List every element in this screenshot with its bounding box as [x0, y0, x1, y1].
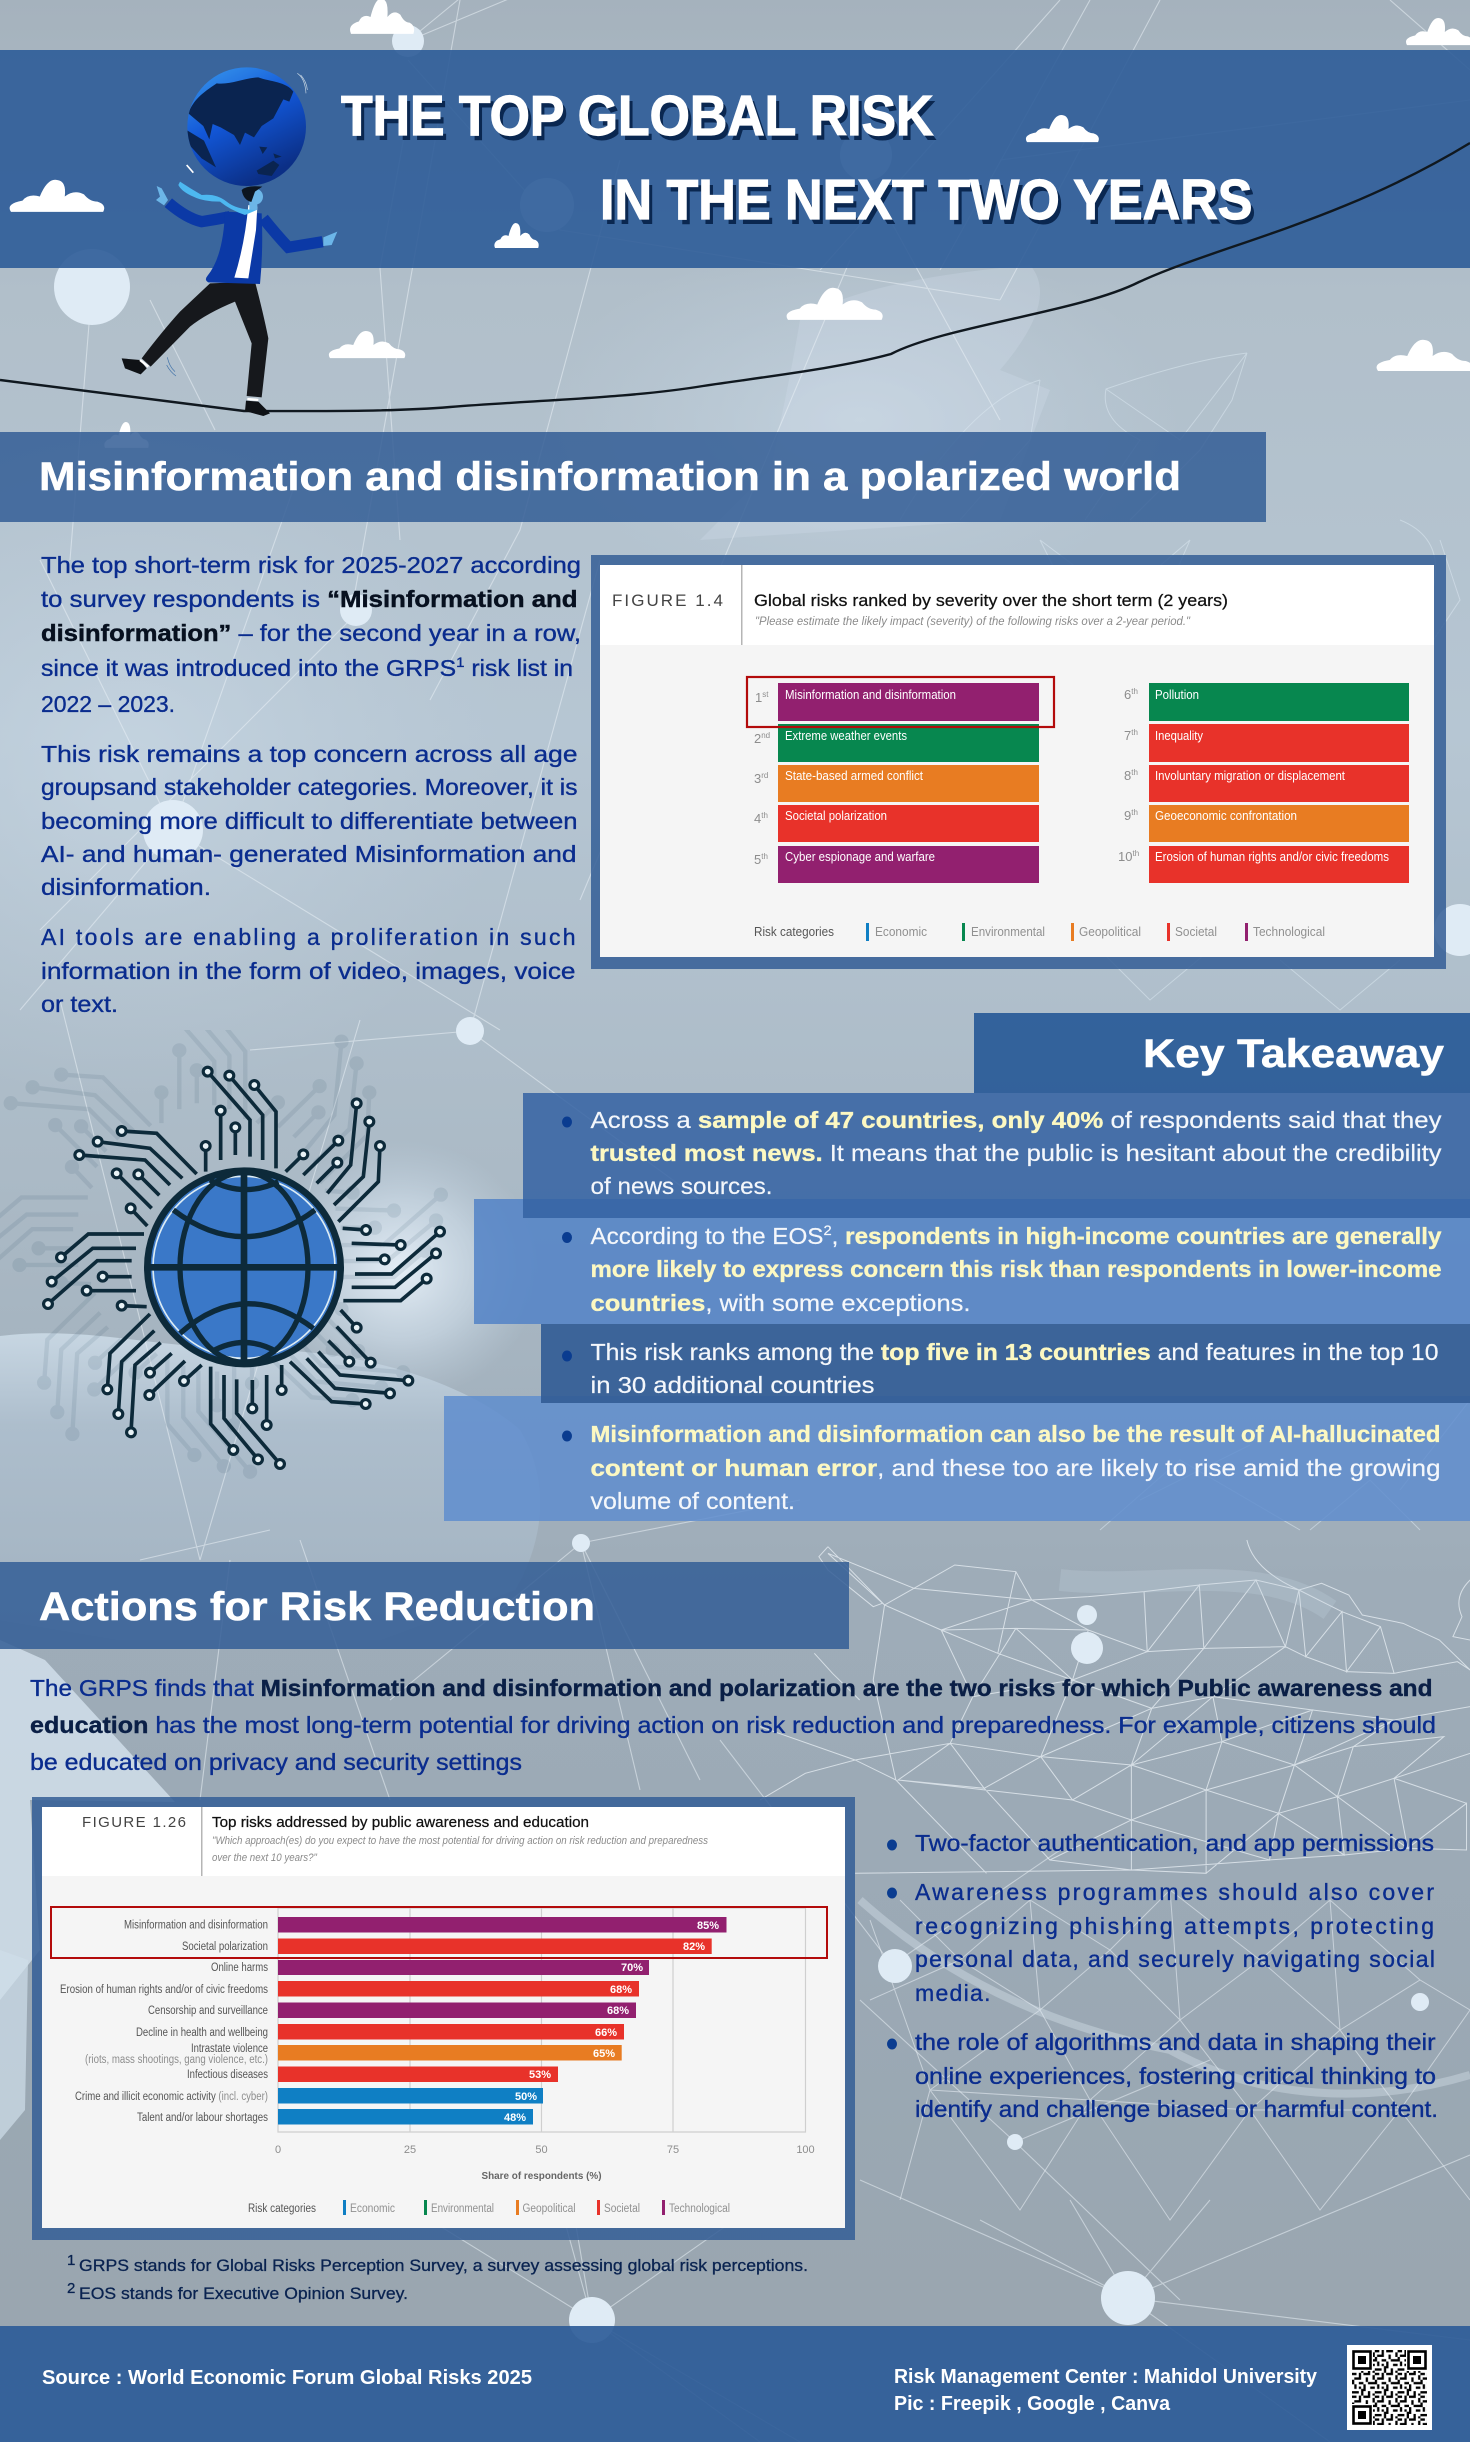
rank labels: 5 [754, 852, 761, 867]
list: awareness actions: personal data, and securely navigating social [915, 1946, 1435, 1972]
bar labels: Erosion of human rights and/or of civic freedoms [60, 1984, 268, 1996]
text block: short-term risk explanation: AI- and human- generated Misinformation and [41, 841, 576, 867]
footnotes: 2 [67, 2280, 75, 2297]
list: awareness actions: Awareness programmes should also cover [915, 1879, 1434, 1905]
bar labels: Talent and/or labour shortages [137, 2112, 268, 2124]
bar values: 85% [697, 1920, 719, 1932]
bullet 2 [562, 1222, 1442, 1316]
bullet 2: respondents in high-income countries are generally [845, 1223, 1442, 1249]
chart heading: over the next 10 years?" [212, 1852, 318, 1864]
text block: short-term risk explanation [40, 552, 581, 1017]
risk bars, ranks 1 to 5: State-based armed conflict [785, 768, 923, 783]
legend: risk categories: Environmental [971, 924, 1045, 939]
text block: short-term risk explanation: This risk remains a top concern across all age [41, 741, 578, 767]
legend: risk categories: Societal [1175, 924, 1217, 939]
x axis: 25 [404, 2144, 416, 2156]
panel: key takeaway [444, 1013, 1470, 1521]
x axis [275, 2144, 815, 2182]
list: awareness actions: identify and challenge biased or harmful content. [915, 2096, 1438, 2122]
icon: circuit globe [0, 1030, 448, 1479]
chart heading [82, 1814, 708, 1864]
bar labels: Decline in health and wellbeing [136, 2027, 268, 2039]
bullet 4: volume of content. [590, 1488, 795, 1514]
bar values: 70% [621, 1962, 643, 1974]
footer band [0, 2326, 1470, 2442]
bar labels: Societal polarization [182, 1941, 268, 1953]
risk bars, ranks 6 to 10: Inequality [1155, 728, 1203, 743]
bullet 1: of news sources. [590, 1173, 772, 1199]
bullet 2: According to the EOS [590, 1223, 812, 1249]
rank labels: 1 [755, 690, 762, 705]
text block: GRPS findings: education has the most long-term potential for driving action on risk reduction and preparedness. For example, citizens should [30, 1712, 1436, 1738]
bar labels [60, 1920, 268, 2124]
bullet 3 [562, 1339, 1438, 1398]
legend: risk categories: Technological [669, 2203, 730, 2215]
text block: short-term risk explanation: AI tools are enabling a proliferation in such [41, 924, 576, 950]
list: awareness actions: the role of algorithms and data in shaping their [915, 2029, 1436, 2055]
risk bars, ranks 1 to 5: Cyber espionage and warfare [785, 849, 935, 864]
risk bars, ranks 6 to 10: Geoeconomic confrontation [1155, 808, 1297, 823]
bar labels: Infectious diseases [187, 2069, 268, 2081]
bar values: 68% [607, 2005, 629, 2017]
list: awareness actions: recognizing phishing attempts, protecting [915, 1913, 1434, 1939]
bullet 4: content or human error , and these too are likely to rise amid the growing [590, 1455, 1440, 1481]
tightrope [0, 142, 1470, 412]
heading: actions for risk reduction: Actions for Risk Reduction [39, 1585, 595, 1629]
legend: risk categories [754, 923, 1325, 941]
text block: short-term risk explanation: information in the form of video, images, voice [41, 958, 576, 984]
rank labels: th [1131, 687, 1138, 696]
bar values: 65% [593, 2048, 615, 2060]
plot grid [278, 1908, 806, 2132]
bar labels: Online harms [211, 1962, 268, 1974]
rank labels: th [761, 811, 768, 820]
footnotes [67, 2252, 808, 2303]
panel: figure 1.26 bar chart [32, 1797, 855, 2240]
bullet 2: more likely to express concern this risk than respondents in lower-income [590, 1256, 1442, 1282]
bullet 2: 2 [823, 1222, 832, 1238]
rank labels: rd [761, 771, 768, 780]
title: THE TOP GLOBAL RISK [341, 84, 933, 148]
rank labels: th [1132, 849, 1139, 858]
text block: short-term risk explanation: becoming more difficult to differentiate between [41, 808, 578, 834]
heading: misinformation section: Misinformation and disinformation in a polarized world [39, 455, 1181, 499]
chart heading: "Please estimate the likely impact (severity) of the following risks over a 2-year period." [755, 616, 1191, 628]
rank labels: 3 [754, 771, 761, 786]
footer credits [894, 2366, 1318, 2415]
list: awareness actions [887, 1830, 1438, 2122]
key takeaway band [974, 1013, 1470, 1093]
bar labels: (riots, mass shootings, gang violence, etc.) [85, 2054, 268, 2066]
header band [0, 50, 1470, 268]
bullet 4: Misinformation and disinformation can also be the result of AI-hallucinated [590, 1421, 1440, 1447]
rank labels: th [761, 852, 768, 861]
rank labels: th [1131, 728, 1138, 737]
bullet 1 [562, 1107, 1442, 1199]
bullet 2: countries , with some exceptions. [590, 1290, 970, 1316]
bar values [504, 1920, 719, 2124]
legend: risk categories: Economic [875, 924, 927, 939]
bars [278, 1917, 726, 2124]
risk bars, ranks 1 to 5: Misinformation and disinformation [785, 687, 956, 702]
text block: short-term risk explanation: risk list in [464, 655, 573, 681]
text block: GRPS findings [30, 1675, 1436, 1776]
risk bars, ranks 6 to 10: Erosion of human rights and/or civic freedoms [1155, 849, 1389, 864]
footer credits: Pic : Freepik , Google , Canva [894, 2393, 1171, 2415]
rank labels: nd [761, 731, 770, 740]
rank labels: 8 [1124, 768, 1131, 783]
key takeaway heading: Key Takeaway [1143, 1032, 1445, 1076]
section band: misinformation [0, 432, 1266, 522]
footnotes: 1 [67, 2252, 75, 2269]
highlight box around top risk [747, 677, 1054, 727]
section band: actions for risk reduction [0, 1562, 849, 1649]
text block: short-term risk explanation: 2022 – 2023. [41, 691, 175, 717]
x axis: 0 [275, 2144, 281, 2156]
text block: short-term risk explanation: to survey respondents is “Misinformation and [41, 586, 578, 612]
bullet 2: , [832, 1223, 845, 1249]
bullet 4 [562, 1421, 1440, 1514]
text block: short-term risk explanation: 1 [456, 654, 465, 670]
risk bars, ranks 6 to 10: Pollution [1155, 687, 1199, 702]
risk bars, ranks 1 to 5: Societal polarization [785, 808, 887, 823]
text block: short-term risk explanation: since it was introduced into the GRPS [41, 655, 427, 681]
footer source: Source : World Economic Forum Global Risks 2025 [42, 2367, 532, 2389]
legend: risk categories: Risk categories [248, 2203, 316, 2215]
chart heading: FIGURE 1.4 [612, 591, 723, 610]
list: awareness actions: media. [915, 1980, 990, 2006]
text block: short-term risk explanation: or text. [41, 991, 118, 1017]
risk bars, ranks 6 to 10: Involuntary migration or displacement [1155, 768, 1345, 783]
panel: figure 1.4 risk ranking chart [591, 555, 1446, 969]
chart heading: Top risks addressed by public awareness and education [212, 1814, 589, 1831]
risk bars, ranks 1 to 5: Extreme weather events [785, 728, 907, 743]
decorative wire-frame mesh [760, 1540, 1470, 1873]
legend: risk categories: Societal [604, 2203, 640, 2215]
text block: short-term risk explanation: The top short-term risk for 2025-2027 according [41, 552, 581, 578]
footnotes: GRPS stands for Global Risks Perception Survey, a survey assessing global risk perceptions. [79, 2256, 808, 2275]
x axis: 100 [796, 2144, 815, 2156]
risk bars, ranks 6 to 10 [1149, 683, 1409, 883]
chart heading: "Which approach(es) do you expect to have the most potential for driving action on risk reduction and preparedness [212, 1835, 708, 1847]
rank labels: 2 [754, 731, 761, 746]
footnotes: EOS stands for Executive Opinion Survey. [79, 2284, 408, 2303]
highlight box around top two risks [51, 1907, 827, 1958]
chart heading [612, 591, 1228, 628]
chart heading: Global risks ranked by severity over the short term (2 years) [754, 591, 1228, 610]
bar labels: Misinformation and disinformation [124, 1920, 268, 1932]
bar values: 68% [610, 1984, 632, 1996]
text block: GRPS findings: The GRPS finds that Misinformation and disinformation and polarization are the two risks for which Public awareness and [30, 1675, 1432, 1701]
bullet 3: This risk ranks among the top five in 13 countries and features in the top 10 [590, 1339, 1438, 1365]
bar values: 66% [595, 2027, 617, 2039]
footer credits: Risk Management Center : Mahidol University [894, 2366, 1318, 2388]
bar values: 53% [529, 2069, 551, 2081]
risk bars, ranks 1 to 5 [778, 683, 1039, 883]
bullet 1: trusted most news. It means that the public is hesitant about the credibility [590, 1140, 1442, 1166]
bar labels: Censorship and surveillance [148, 2005, 268, 2017]
bullet 3: in 30 additional countries [590, 1372, 874, 1398]
bar values: 50% [515, 2091, 537, 2103]
bar values: 48% [504, 2112, 526, 2124]
list: awareness actions: Two-factor authentication, and app permissions [915, 1830, 1434, 1856]
text block: short-term risk explanation: disinformation” – for the second year in a row, [41, 620, 581, 646]
rank labels: 10 [1118, 849, 1132, 864]
rank labels: 6 [1124, 687, 1131, 702]
legend: risk categories: Geopolitical [1079, 924, 1141, 939]
rank labels: st [762, 690, 769, 699]
title [341, 84, 1254, 232]
clouds [10, 0, 1470, 371]
rank labels: th [1131, 768, 1138, 777]
x axis: Share of respondents (%) [482, 2170, 602, 2182]
rank labels: th [1131, 808, 1138, 817]
text block: GRPS findings: be educated on privacy and security settings [30, 1749, 522, 1775]
bullet 1: Across a sample of 47 countries, only 40% of respondents said that they [590, 1107, 1442, 1133]
rank labels: 7 [1124, 728, 1131, 743]
text block: short-term risk explanation: groupsand stakeholder categories. Moreover, it is [41, 774, 578, 800]
legend: risk categories: Technological [1253, 924, 1325, 939]
list: awareness actions: online experiences, fostering critical thinking to [915, 2063, 1436, 2089]
dark card 3 [541, 1324, 1470, 1403]
x axis: 75 [667, 2144, 679, 2156]
rank labels [754, 687, 1139, 867]
legend: risk categories: Economic [350, 2203, 395, 2215]
light card 4 underlay [444, 1396, 1470, 1521]
rank labels: 9 [1124, 808, 1131, 823]
rank labels: 4 [754, 811, 761, 826]
light card 2 underlay [474, 1199, 1470, 1324]
bar labels: Intrastate violence [191, 2043, 268, 2055]
QR code [1347, 2345, 1432, 2430]
bar values: 82% [683, 1941, 705, 1953]
legend: risk categories: Risk categories [754, 924, 834, 939]
bar labels: Crime and illicit economic activity (incl. cyber) [75, 2091, 268, 2103]
legend: risk categories: Environmental [431, 2203, 494, 2215]
dark card 1 [523, 1093, 1470, 1218]
text block: short-term risk explanation: disinformation. [41, 874, 211, 900]
illustration: man balancing the globe on a tightrope [122, 67, 338, 416]
chart heading: FIGURE 1.26 [82, 1814, 186, 1831]
title: IN THE NEXT TWO YEARS [600, 168, 1252, 232]
legend: risk categories: Geopolitical [522, 2203, 576, 2215]
legend: risk categories [248, 2200, 730, 2215]
x axis: 50 [535, 2144, 548, 2156]
